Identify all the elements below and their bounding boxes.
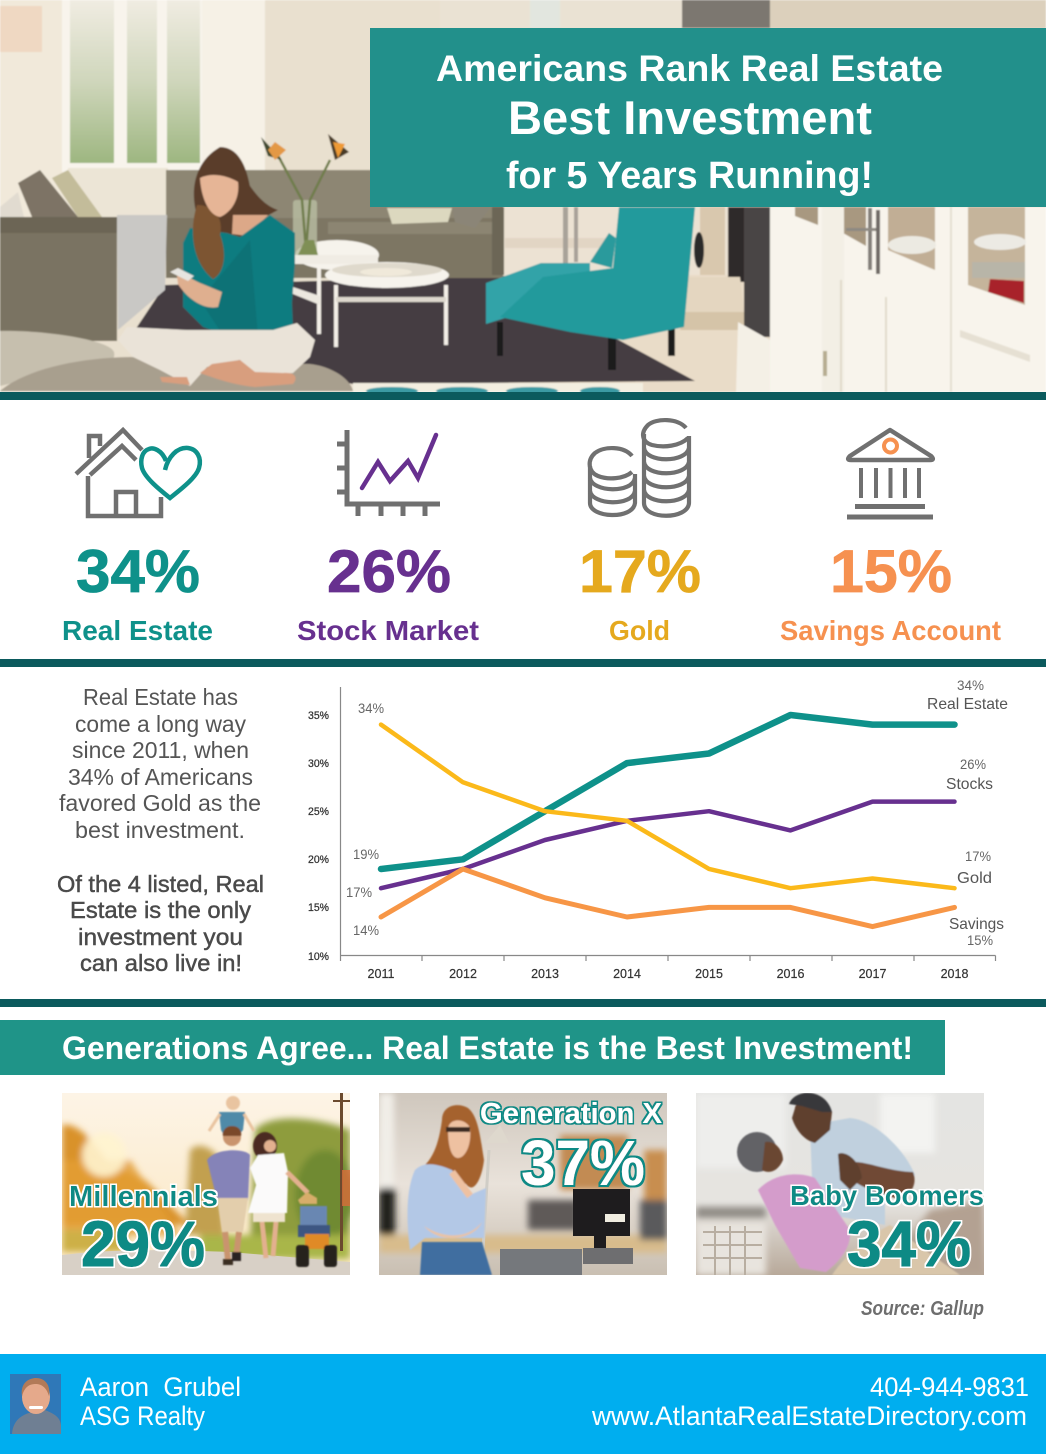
text block: only investment you can live in: Of the 4 listed, Real [57,871,264,897]
x axis labels [368,967,968,981]
data labels: 15% [967,933,993,948]
website: www.AtlantaRealEstateDirectory.com [591,1401,1027,1431]
title line 2: Best Investment [508,91,872,144]
mother [253,1132,277,1160]
x axis labels: 2017 [859,967,886,981]
front rug and ottomans [0,331,643,395]
line: Real Estate [381,715,954,869]
line chart: investment preference 2011-2018 [308,678,1008,981]
icon: bank building [847,430,933,517]
x axis labels: 2011 [368,967,394,981]
chart axes [340,687,996,961]
data labels: 14% [353,923,379,938]
agent name: Aaron Grubel [80,1372,241,1402]
band under hero [0,392,1046,400]
icon: house with heart [76,430,200,516]
y axis labels [308,710,329,963]
hero photo: woman in living room [0,0,1046,395]
series labels: Stocks [946,776,993,793]
text block: only investment you can live in: can also live in! [80,950,242,976]
title line 3: for 5 Years Running! [506,155,873,197]
left sofa [117,215,167,330]
data labels: 34% [957,678,984,693]
series labels: Gold [957,870,992,887]
icon: stock chart [337,430,440,516]
text block: intro paragraph [59,684,261,843]
y axis labels: 25% [308,806,329,818]
text block: only investment you can live in: Estate is the only [70,897,252,923]
footer contact bar [0,1354,1046,1454]
y axis labels: 35% [308,710,329,722]
text block: intro paragraph: since 2011, when [72,737,249,763]
stat: 26%: 26% [327,538,451,605]
data labels: 34% [358,701,384,716]
x axis labels: 2015 [695,967,723,981]
teal armchair [486,207,704,370]
father [222,1134,242,1147]
title banner [370,28,1046,207]
text block: only investment you can live in: investment you [78,924,243,950]
text block: only investment you can live in [57,871,264,976]
x axis labels: 2016 [777,967,804,981]
heading: generations agree [0,1020,945,1075]
floor [690,276,727,277]
stat: 34%: 34% [76,538,200,605]
label: 29%: 29% [81,1208,205,1280]
x axis labels: 2012 [449,967,477,981]
label: Stock Market: Stock Market [297,615,479,646]
doors [736,207,1046,392]
label: Generation X: Generation X [480,1098,663,1130]
label: 34%: 34% [847,1208,971,1280]
label: Gold: Gold [609,615,670,646]
data labels [346,678,993,948]
rug [125,276,695,384]
data labels: 19% [353,847,379,862]
x axis labels: 2018 [941,967,968,981]
line: Stocks [381,802,954,888]
text block: intro paragraph: favored Gold as the [59,790,261,816]
line: Savings [381,869,954,927]
label: Baby Boomers: Baby Boomers [790,1180,984,1211]
series labels: Real Estate [927,696,1008,713]
photo card: Generation X [379,1093,667,1275]
panel: investment ranking [62,420,1001,646]
text block: intro paragraph: best investment. [75,817,245,843]
band under stats [0,659,1046,667]
label: Real Estate: Real Estate [62,615,213,646]
label: Savings Account: Savings Account [780,615,1001,646]
text block: intro paragraph: Real Estate has [83,684,238,710]
y axis labels: 15% [308,902,329,914]
label: 37%: 37% [521,1127,645,1199]
text block: intro paragraph: 34% of Americans [68,764,253,790]
line: Gold [381,725,954,888]
data labels: 17% [965,849,991,864]
boy on toy tractor [298,1192,317,1204]
data labels: 17% [346,885,372,900]
photo card: Baby Boomers [696,1093,984,1280]
vase and flowers [261,134,349,255]
phone: 404-944-9831 [870,1372,1029,1402]
woman [118,147,315,387]
series labels: Savings [949,916,1004,933]
round tables [288,240,449,347]
label: Millennials: Millennials [69,1181,218,1213]
agent portrait [10,1374,61,1434]
y axis labels: 20% [308,854,329,866]
company: ASG Realty [80,1401,205,1431]
photo card: Millennials [62,1093,355,1280]
rear sofa [166,170,503,222]
title line 1: Americans Rank Real Estate [436,48,943,89]
data labels: 26% [960,757,986,772]
y axis labels: 30% [308,758,329,770]
y axis labels: 10% [308,951,329,963]
stat: 17%: 17% [579,538,701,605]
series labels [927,696,1008,933]
icon: coin stacks [590,420,689,516]
band under chart [0,999,1046,1007]
x axis labels: 2013 [531,967,559,981]
x axis labels: 2014 [613,967,641,981]
text block: intro paragraph: come a long way [75,711,246,737]
stat: 15%: 15% [830,538,952,605]
source note: Source: Gallup [861,1298,984,1320]
heading: generations agree: Generations Agree... Real Estate is the Best Investment! [62,1030,913,1066]
child on shoulders [226,1096,240,1110]
